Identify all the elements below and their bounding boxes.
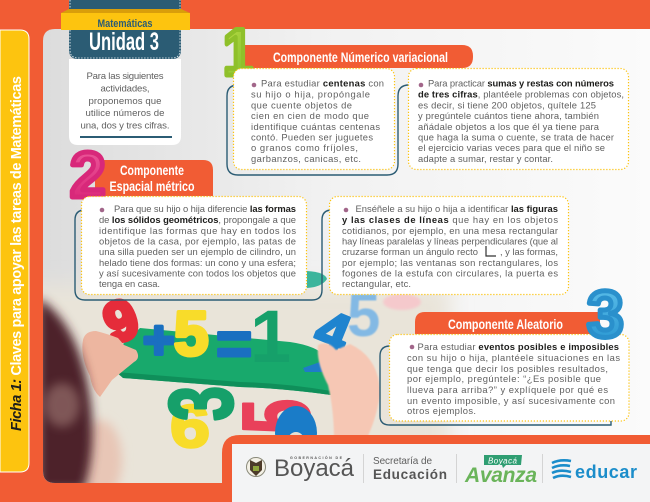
text box: eventos posibles: con su hijo o hija, plantéele situaciones en las [407, 352, 620, 363]
photo panel: child playing with numbers: 6 [170, 394, 210, 461]
photo panel: child playing with numbers: 5 [224, 399, 330, 434]
section 3: Componente Aleatorio [390, 277, 629, 421]
section 2 heading: Espacial métrico [110, 178, 194, 194]
logo: Secretaría de Educación: Educación [373, 467, 447, 482]
text box: figuras y líneas: , y las formas, [500, 246, 558, 257]
text box: sumas y restas: que haga la suma o cuente, se trata de hacer [418, 132, 614, 142]
logo: Secretaría de Educación: Secretaría de [373, 456, 432, 467]
text box: sumas y restas: el ejercicio varias veces para que el niño se [418, 142, 605, 153]
section 2: Componente Espacial métrico [70, 139, 568, 294]
text box: sumas y restas: Para practicar sumas y restas con números [428, 78, 614, 88]
number 2: 2 [70, 139, 106, 211]
text box: eventos posibles: un evento imposible, y así sucesivamente con [407, 395, 615, 406]
blurred head [38, 298, 122, 500]
text box: eventos posibles: que tenga que decir los posibles resultados, [407, 363, 608, 374]
unit tag: Matemáticas [98, 18, 152, 30]
text box: centenas [234, 68, 394, 170]
photo panel: child playing with numbers: 5 [174, 300, 208, 369]
right hand [318, 343, 380, 440]
text box: sumas y restas [408, 68, 628, 170]
text box: eventos posibles [390, 334, 629, 421]
text box: sumas y restas: de tres cifras, plantéele problemas con objetos, [418, 88, 624, 100]
photo panel: child playing with numbers: 9 [96, 285, 146, 355]
text box: sólidos geométricos: una silla pueden ser un ejemplo de cilindro, un [99, 246, 296, 257]
text box: figuras y líneas: fogones de la estufa con circulares, la puerta es [342, 268, 558, 278]
green board [108, 328, 331, 395]
text box: figuras y líneas: hay líneas paralelas y líneas perpendiculares (que al [342, 236, 558, 246]
section 2 heading [95, 160, 213, 196]
unit tag: Unidad 3 [89, 28, 159, 56]
photo panel: child playing with numbers: 3 [152, 386, 252, 421]
text box: centenas: su hijo o hija, propóngale [251, 88, 370, 100]
intro note: una, dos y tres cifras. [80, 120, 170, 132]
text box: sumas y restas: añádale objetos a los que él ya tiene para [418, 121, 600, 132]
text box: sólidos geométricos [82, 196, 306, 294]
photo panel: child playing with numbers: + [143, 310, 175, 370]
text box: centenas: Para estudiar centenas con [261, 78, 384, 88]
logo: Educar [552, 460, 637, 482]
text box: centenas: que cuente objetos de [251, 100, 352, 110]
logo: Gobernación de Boyacá: GOBERNACIÓN DE [290, 455, 343, 460]
logo: Secretaría de Educación [373, 456, 447, 482]
icon: right angle [486, 246, 496, 256]
section 3 heading [415, 312, 600, 334]
intro note: proponemos que [88, 96, 162, 107]
text box: sólidos geométricos: tenga en casa. [99, 278, 160, 289]
text box: figuras y líneas [330, 196, 568, 294]
unit tag [61, 0, 190, 59]
left hand [82, 331, 138, 397]
section 1 heading [245, 45, 473, 68]
connector lines [75, 85, 611, 425]
text box: centenas: o granos como fríjoles, [251, 142, 358, 153]
footer panel with logos [222, 435, 650, 502]
text box: figuras y líneas: cruzarse forman un ángulo recto [342, 246, 478, 257]
side tab: sheet title: Ficha 1: Claves para apoyar las tareas de Matemáticas [9, 76, 25, 431]
logo: Boyacá Avanza: Avanza [464, 464, 537, 487]
photo panel: child playing with numbers: = [216, 310, 252, 379]
text box: sólidos geométricos: y así sucesivamente con todos los objetos que [99, 268, 296, 278]
logo: Boyacá Avanza: Boyacá [488, 456, 518, 466]
text box: figuras y líneas: cotidianos, por ejemplo, en una mesa rectangular [342, 225, 558, 236]
photo panel: child playing with numbers: 1 [250, 295, 291, 378]
logo: Gobernación de Boyacá: Boyacá [274, 455, 355, 482]
text box: sumas y restas: adapte a sumar, restar y contar. [418, 153, 553, 164]
number 1: 1 [223, 15, 253, 89]
text box: centenas: cien en cien de modo que [251, 110, 369, 121]
text box: sumas y restas: es decir, si tiene 200 objetos, quítele 125 [418, 100, 596, 110]
intro note: Para las siguientes [86, 71, 164, 82]
intro note: utilice números de [86, 108, 164, 119]
text box: sólidos geométricos: identifique las formas que hay en todos los [99, 225, 296, 236]
text box: figuras y líneas: Enséñele a su hijo o hija a identificar las figuras [356, 203, 558, 214]
section 3 heading: Componente Aleatorio [448, 316, 563, 332]
text box: sólidos geométricos: de los sólidos geométricos, propongale a que [99, 214, 296, 225]
text box: figuras y líneas: rectangular, etc. [342, 278, 411, 289]
intro note [69, 59, 181, 145]
text box: sólidos geométricos: helado tiene dos formas: un cono y una esfera; [99, 257, 296, 268]
intro note: actividades, [100, 84, 150, 94]
text box: sólidos geométricos: Para que su hijo o hija diferencie las formas [114, 203, 296, 214]
section 1 heading: Componente Númerico variacional [273, 49, 448, 65]
side tab: sheet title [0, 30, 29, 472]
text box: sumas y restas: y pregúntele cuántos tiene ahora, también [418, 110, 599, 121]
number 3: 3 [587, 277, 624, 351]
text box: figuras y líneas: por ejemplo; las ventanas son rectangulares, los [342, 257, 558, 268]
text box: centenas: contó. Pueden ser juguetes [251, 132, 373, 142]
logo: Educar: educar [575, 462, 637, 482]
text box: sólidos geométricos: objetos de la casa, por ejemplo, las patas de [99, 236, 296, 246]
text box: eventos posibles: por ejemplo, pregúntele: “¿Es posible que [407, 373, 601, 384]
text box: centenas: identifique cuántas centenas [251, 121, 380, 132]
section 1: Componente Numérico variacional [223, 15, 628, 169]
text box: eventos posibles: llueva para arriba?” y explíquele por qué es [407, 384, 608, 395]
section 2 heading: Componente [120, 162, 184, 178]
photo panel: child playing with numbers: 5 [347, 282, 380, 349]
text box: eventos posibles: Para estudiar eventos posibles e imposibles [418, 341, 619, 352]
text box: figuras y líneas: y las clases de líneas que hay en los objetos [342, 214, 558, 225]
text box: centenas: garbanzos, canicas, etc. [251, 153, 361, 164]
photo panel: child playing with numbers: 4 [307, 297, 359, 367]
text box: eventos posibles: otros ejemplos. [407, 405, 476, 416]
